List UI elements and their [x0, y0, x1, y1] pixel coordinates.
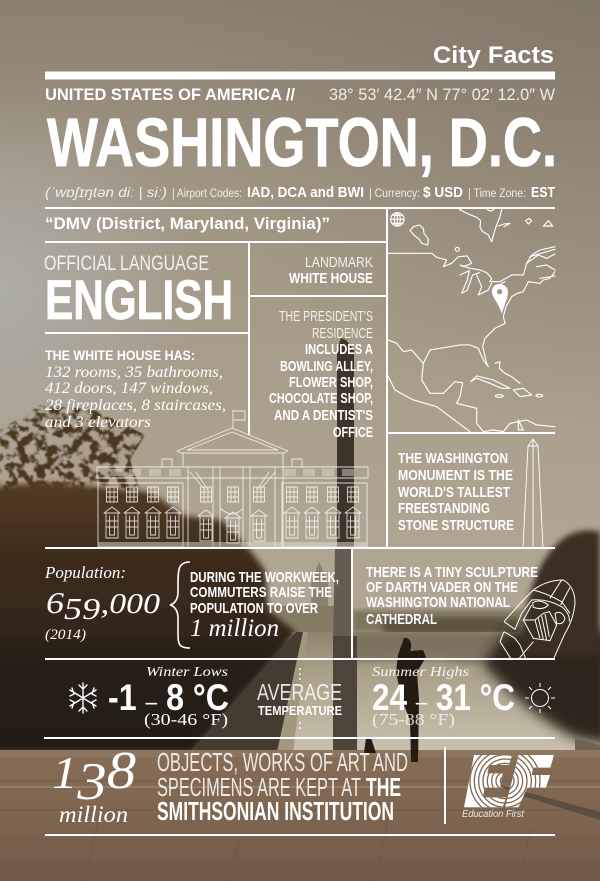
winter label: Winter Lows — [146, 665, 229, 680]
panel: washington monument — [398, 439, 543, 548]
panel: darth vader: OF DARTH VADER ON THE — [366, 579, 518, 596]
icon: globe — [391, 213, 404, 226]
left forest — [0, 405, 296, 752]
panel: darth vader: WASHINGTON NATIONAL — [366, 594, 510, 611]
commuters text: DURING THE WORKWEEK, — [190, 569, 339, 586]
residence text: THE PRESIDENT'S — [279, 308, 373, 325]
winter range: -1 – 8 °C — [108, 677, 229, 718]
white house figures: 28 fireplaces, 8 staircases, — [45, 397, 226, 414]
logo caption: Education First — [462, 809, 525, 820]
panel: population: POPULATION TO OVER — [190, 600, 318, 617]
panel: population: 1 million — [190, 615, 279, 642]
pronunciation: (ˈwɒʃɪŋtən diː | siː) — [45, 184, 167, 200]
population value: 59 — [64, 591, 100, 626]
language label: OFFICIAL LANGUAGE — [44, 252, 209, 275]
map: north america — [387, 209, 555, 432]
population year: (2014) — [45, 627, 86, 643]
details line: EST — [531, 184, 555, 201]
icon: location pin — [492, 284, 508, 314]
icon: monument — [523, 439, 543, 548]
airport codes: | Airport Codes: — [172, 188, 242, 200]
logo: EF Education First — [462, 755, 554, 817]
panel: washington monument: WORLD'S TALLEST — [398, 485, 510, 501]
monument text: THE WASHINGTON — [398, 451, 508, 467]
country: UNITED STATES OF AMERICA // — [45, 86, 295, 104]
panel: president's residence: BOWLING ALLEY, — [280, 358, 373, 375]
time zone: | Time Zone: — [468, 188, 526, 200]
darth vader text: THERE IS A TINY SCULPTURE — [366, 564, 538, 581]
panel: president's residence: INCLUDES A — [305, 341, 373, 358]
panel: temperature — [70, 665, 555, 732]
panel: population — [44, 562, 339, 648]
grid lines — [44, 208, 555, 835]
white house figures — [45, 364, 226, 431]
panel: smithsonian: THE — [366, 772, 401, 802]
panel: washington monument: MONUMENT IS THE — [398, 468, 513, 484]
panel: president's residence: RESIDENCE — [312, 325, 373, 342]
white house heading: THE WHITE HOUSE HAS: — [45, 347, 195, 363]
population value: 6 — [46, 585, 62, 620]
sparse foliage — [0, 405, 145, 500]
obelisk and reflection — [337, 338, 354, 548]
population value: , — [100, 585, 109, 620]
panel: president's residence — [269, 308, 373, 441]
right trees — [522, 531, 600, 655]
panel: washington monument: FREESTANDING — [398, 501, 490, 517]
panel: washington monument: STONE STRUCTURE — [398, 518, 514, 534]
person — [396, 638, 426, 762]
icon: white house drawing — [97, 410, 368, 547]
icon: snowflake — [70, 683, 96, 713]
language value: ENGLISH — [45, 268, 233, 331]
panel: president's residence: CHOCOLATE SHOP, — [269, 390, 373, 407]
white house figures: 412 doors, 147 windows, — [45, 380, 213, 397]
population label: Population: — [44, 563, 126, 582]
currency: | Currency: — [369, 188, 420, 200]
landmark value: WHITE HOUSE — [289, 270, 373, 287]
panel: smithsonian — [52, 742, 408, 827]
smithsonian unit: million — [59, 802, 128, 827]
panel: president's residence: FLOWER SHOP, — [289, 374, 373, 391]
average label: AVERAGE — [257, 679, 342, 705]
smithsonian number: 1 — [52, 747, 75, 798]
panel: white house facts — [45, 347, 226, 431]
summer label: Summer Highs — [372, 665, 470, 680]
population value: 000 — [109, 588, 161, 620]
dense foliage — [0, 482, 296, 752]
pavement — [0, 750, 600, 881]
panel: president's residence: OFFICE — [333, 424, 373, 441]
brace — [170, 562, 190, 648]
capitol dome — [311, 562, 328, 606]
summer fahrenheit: (75-88 °F) — [372, 710, 455, 729]
panel: landmark — [289, 254, 373, 287]
top bar — [45, 72, 555, 80]
panel: smithsonian: SPECIMENS ARE KEPT AT — [157, 772, 361, 802]
summer range: 24 – 31 °C — [372, 677, 515, 718]
reflecting pool — [279, 632, 600, 752]
header label: City Facts: City Facts — [433, 42, 554, 69]
smithsonian number: 3 — [76, 753, 107, 811]
EF mark — [464, 755, 554, 808]
lawn and horizon — [255, 606, 352, 632]
temperature label: TEMPERATURE — [258, 703, 342, 718]
coordinates: 38° 53′ 42.4″ N 77° 02′ 12.0″ W — [329, 86, 555, 104]
white house figures: and 3 elevators — [45, 414, 151, 431]
details line — [45, 184, 555, 201]
grass and walkway — [0, 640, 300, 752]
landmark label: LANDMARK — [305, 254, 373, 271]
white house figures: 132 rooms, 35 bathrooms, — [45, 364, 223, 381]
dotted separators — [299, 668, 301, 732]
smithsonian number: 8 — [107, 742, 136, 800]
details line: $ USD — [423, 184, 463, 201]
panel: darth vader: CATHEDRAL — [366, 611, 437, 628]
panel: president's residence: AND A DENTIST'S — [274, 407, 373, 424]
icon: sun — [525, 683, 555, 713]
panel: population: COMMUTERS RAISE THE — [190, 584, 332, 601]
coastlines — [459, 209, 502, 242]
winter fahrenheit: (30-46 °F) — [144, 710, 228, 729]
smithsonian text: OBJECTS, WORKS OF ART AND — [157, 747, 408, 777]
panel: smithsonian: SMITHSONIAN INSTITUTION — [157, 796, 394, 826]
panel: darth vader — [366, 564, 575, 659]
icon: darth vader helmet — [500, 580, 575, 659]
panel: language — [44, 252, 233, 331]
nickname: “DMV (District, Maryland, Virginia)” — [45, 215, 330, 233]
details line: IAD, DCA and BWI — [247, 184, 364, 201]
